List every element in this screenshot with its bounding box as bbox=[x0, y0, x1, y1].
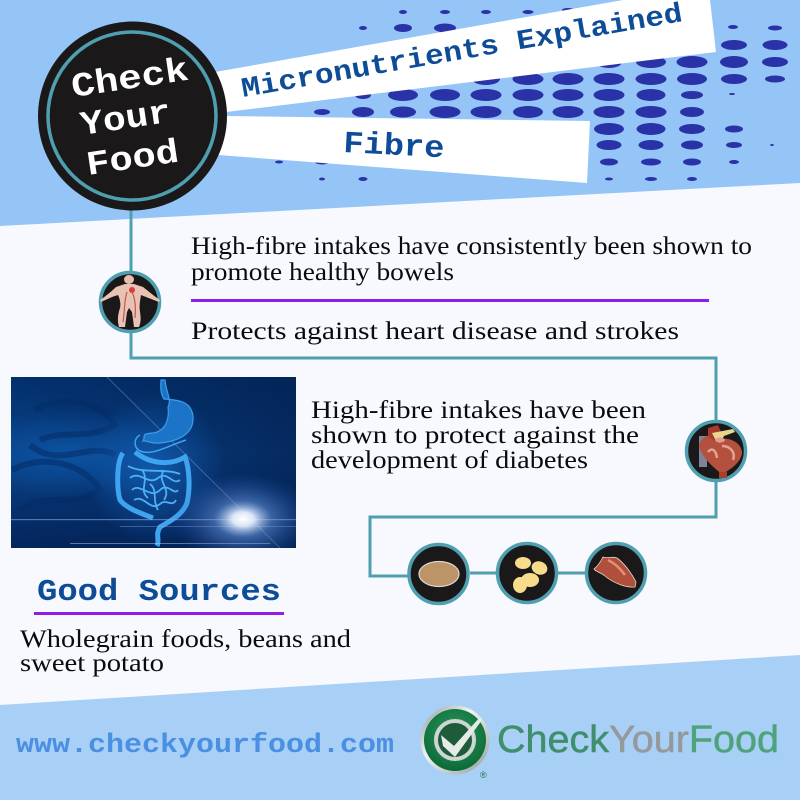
heading underline bbox=[34, 612, 284, 615]
text: good sources list: sweet potato bbox=[20, 650, 164, 677]
badge: Check Your Food: Your bbox=[78, 95, 174, 146]
text: diabetes benefit: development of diabetes bbox=[311, 447, 588, 474]
text: bowel health benefit: promote healthy bowels bbox=[191, 259, 454, 286]
text: heart benefit: Protects against heart disease and strokes bbox=[191, 318, 679, 345]
connector line bbox=[131, 200, 716, 576]
badge: Check Your Food: Food bbox=[84, 135, 182, 186]
icon: human body circulatory system bbox=[100, 272, 160, 332]
badge: Check Your Food bbox=[38, 22, 227, 210]
website URL: www.checkyourfood.com bbox=[16, 731, 394, 761]
logo: CheckYourFood bbox=[420, 706, 779, 780]
text: bowel health benefit: High-fibre intakes have consistently been shown to bbox=[191, 233, 752, 260]
halftone dot pattern bbox=[275, 8, 788, 181]
icon: wholegrain bowl bbox=[409, 544, 468, 604]
logo: CheckYourFood: ® bbox=[480, 770, 487, 780]
image: digestive system bbox=[11, 377, 296, 548]
icon: beans bbox=[498, 544, 556, 602]
badge: Check Your Food: Check bbox=[69, 53, 191, 108]
banner: Fibre: Fibre bbox=[342, 127, 445, 167]
logo: CheckYourFood: CheckYourFood bbox=[497, 719, 779, 761]
divider bbox=[191, 299, 709, 302]
text: diabetes benefit bbox=[311, 397, 647, 474]
header band bbox=[0, 0, 800, 226]
banner: Fibre bbox=[218, 116, 590, 183]
text: good sources list bbox=[20, 626, 352, 677]
banner: Micronutrients Explained: Micronutrients Explained bbox=[239, 0, 685, 106]
icon: sweet potato bbox=[586, 544, 646, 602]
text: diabetes benefit: High-fibre intakes have been bbox=[311, 397, 647, 424]
footer band bbox=[0, 655, 800, 800]
text: good sources list: Wholegrain foods, beans and bbox=[20, 626, 352, 653]
icon: heart bbox=[686, 422, 746, 480]
text: diabetes benefit: shown to protect against the bbox=[311, 422, 639, 449]
heading: Good Sources: Good Sources bbox=[37, 575, 281, 610]
text: bowel health benefit bbox=[191, 233, 752, 286]
